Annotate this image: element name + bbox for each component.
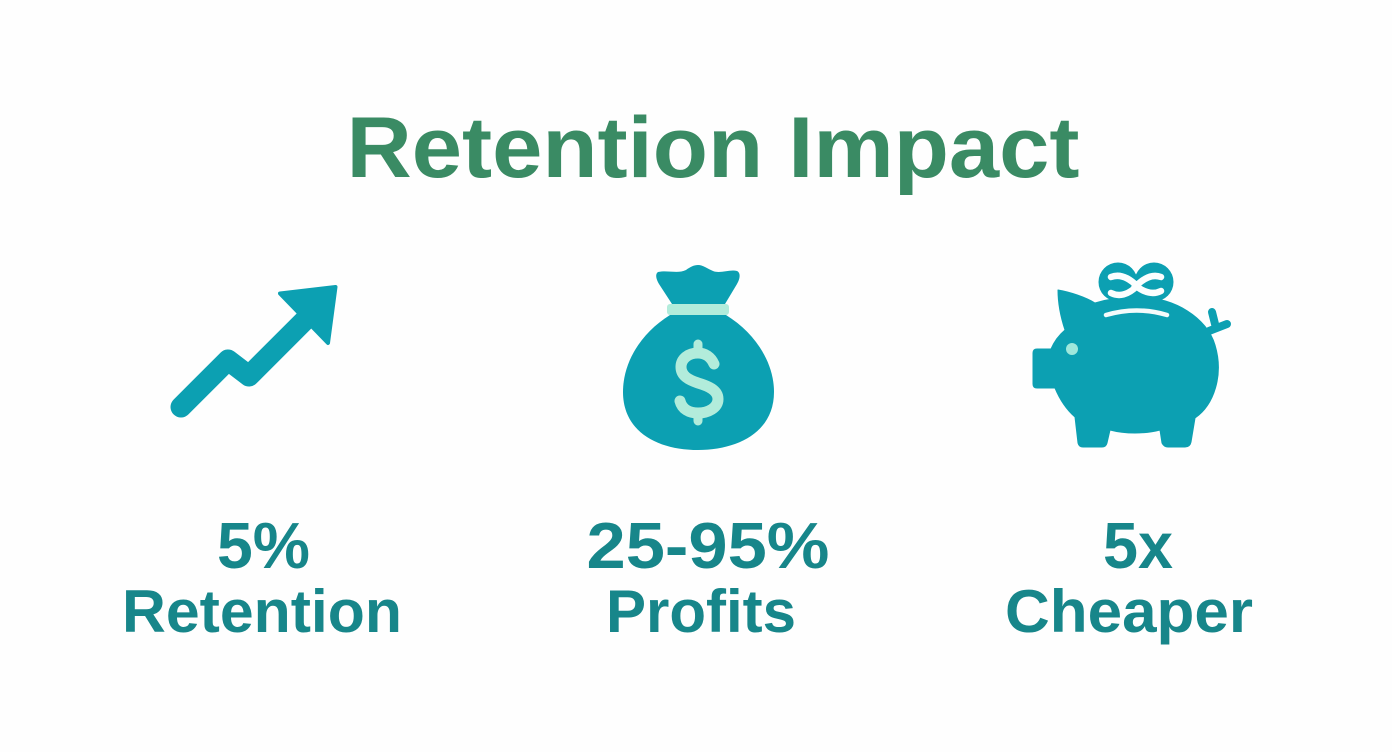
- stat: 25-95% profits: [586, 509, 830, 645]
- icon: piggy bank: [1033, 262, 1227, 447]
- icon: money bag: [623, 265, 774, 450]
- dollar sign: [680, 353, 718, 413]
- stat: 5x cheaper: [1005, 509, 1253, 645]
- stat: 25-95% profits: 25-95%: [586, 509, 830, 582]
- stat: 5% retention: Retention: [122, 578, 402, 645]
- eye: [1066, 343, 1078, 355]
- title: Retention Impact: [346, 100, 1080, 196]
- stat: 5% retention: [122, 509, 402, 645]
- stat: 5% retention: 5%: [217, 509, 310, 582]
- stat: 5x cheaper: 5x: [1103, 509, 1173, 582]
- stat: 5x cheaper: Cheaper: [1005, 578, 1253, 645]
- winding key: [1098, 262, 1138, 302]
- tail: [1209, 312, 1227, 331]
- stat: 25-95% profits: Profits: [606, 578, 796, 645]
- coin slot: [1106, 310, 1167, 315]
- icon: rising arrow: [181, 287, 336, 407]
- band: [667, 304, 729, 315]
